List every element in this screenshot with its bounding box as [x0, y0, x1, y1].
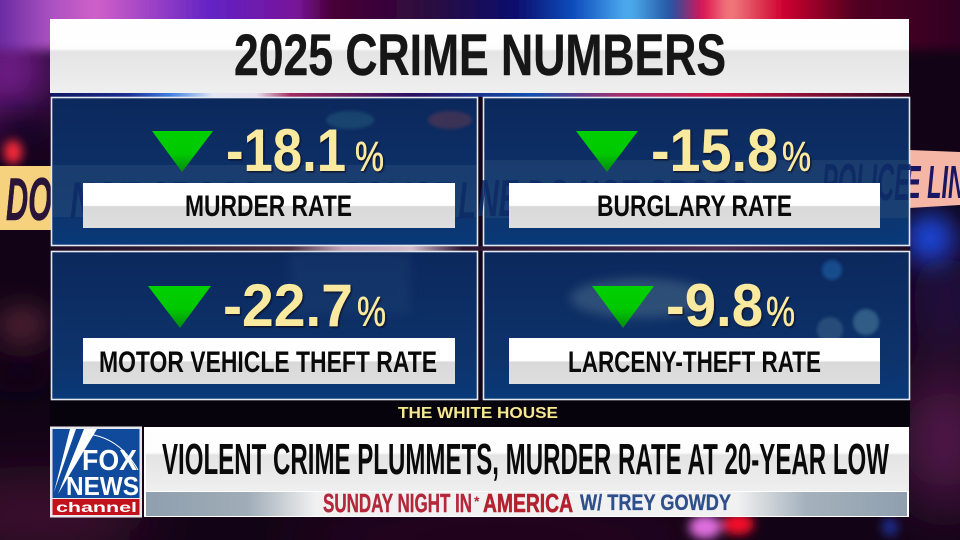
logo: fox news channel [50, 426, 142, 518]
show strip [146, 488, 907, 518]
label: MURDER RATE [185, 190, 352, 223]
label [509, 338, 880, 384]
panel: murder rate: POLICE L [343, 172, 476, 230]
label [83, 183, 455, 228]
logo: fox news channel: channel [56, 499, 137, 515]
value: % [355, 133, 384, 180]
police tape left [0, 166, 52, 233]
title: 2025 CRIME NUMBERS [234, 23, 726, 88]
value: -18.1 [226, 117, 346, 184]
panel: larceny-theft rate [484, 252, 910, 400]
label: LARCENY-THEFT RATE [568, 346, 821, 379]
panel: murder rate: NOT CROSS [70, 172, 260, 230]
label [83, 338, 455, 384]
logo: fox news channel: FOX [82, 445, 138, 477]
icon: down arrow [592, 286, 654, 328]
value: -22.7 [223, 272, 353, 339]
headline banner [144, 427, 909, 518]
panel: burglary rate [478, 98, 911, 246]
value: % [782, 133, 811, 180]
title bar [50, 19, 909, 93]
panel: motor vehicle theft rate [52, 252, 478, 400]
value: % [357, 288, 386, 335]
value: % [766, 288, 795, 335]
icon: down arrow [148, 286, 211, 328]
source credit: THE WHITE HOUSE [398, 405, 558, 422]
show strip: W/ TREY GOWDY [580, 490, 731, 515]
panel: burglary rate: NE DO NOT CROSS [478, 170, 748, 228]
label: BURGLARY RATE [597, 190, 792, 223]
value: -9.8 [666, 272, 763, 339]
show strip: AMERICA [483, 488, 573, 518]
icon: down arrow [576, 131, 638, 172]
show strip: * [474, 493, 480, 509]
value: -15.8 [651, 117, 778, 184]
icon: down arrow [152, 131, 213, 172]
panel: murder rate [52, 98, 478, 246]
label: MOTOR VEHICLE THEFT RATE [99, 346, 437, 379]
strip of lights between title and panels [50, 93, 910, 251]
logo: fox news channel: NEWS [66, 471, 139, 501]
show strip: SUNDAY NIGHT IN [323, 488, 472, 518]
police tape left: DO [6, 166, 52, 233]
label [509, 183, 880, 228]
